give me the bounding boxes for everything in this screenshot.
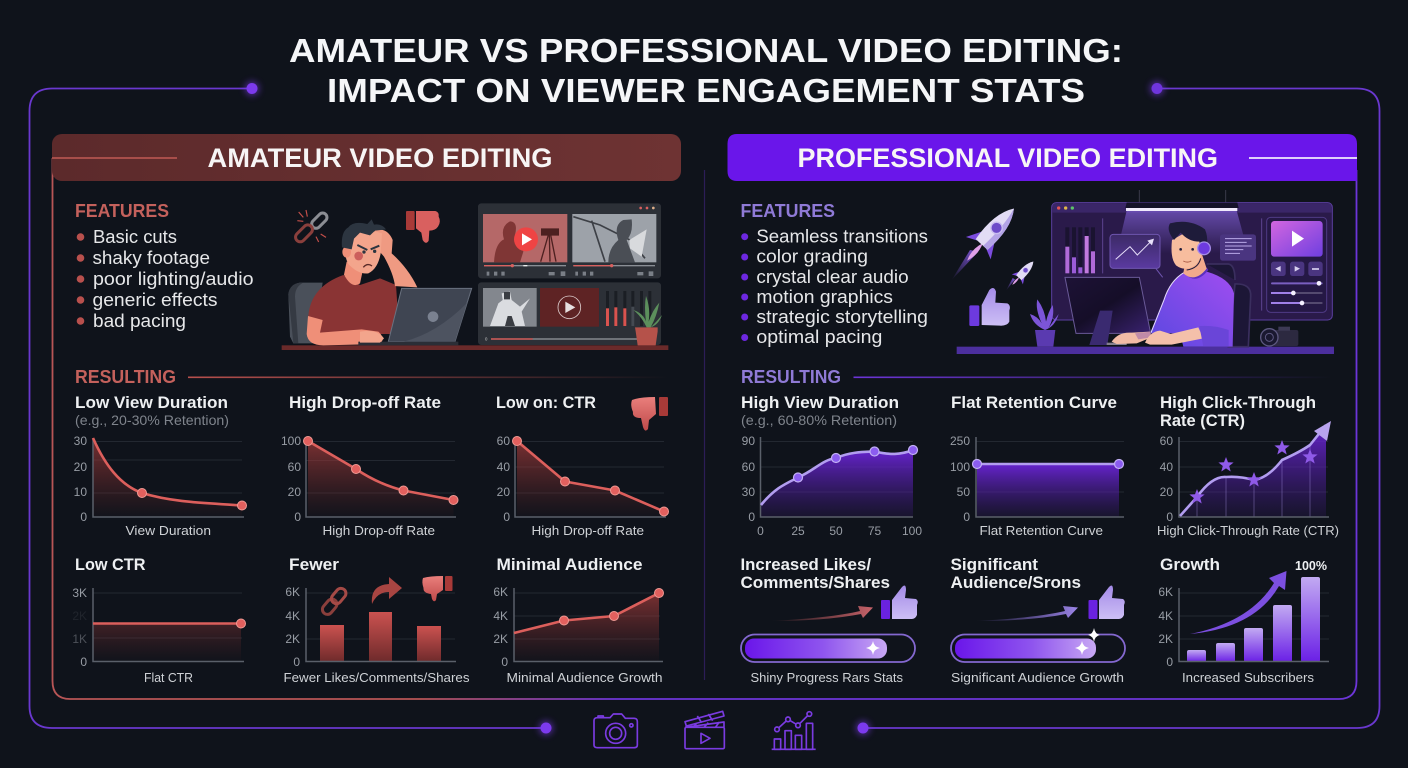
plant <box>1030 299 1059 347</box>
amateur header <box>52 134 681 181</box>
professional features list: optimal pacing <box>756 327 882 347</box>
chart: high view duration: (e.g., 60-80% Retention) <box>741 412 897 428</box>
title <box>289 32 1123 109</box>
chart: fewer likes bars: 2K <box>285 632 300 646</box>
desk <box>957 347 1334 354</box>
stat: increased likes progress bar <box>740 556 918 685</box>
foreground monitor <box>1065 277 1151 345</box>
chart: fewer likes bars: 4K <box>285 609 300 623</box>
title: IMPACT ON VIEWER ENGAGEMENT STATS <box>327 72 1085 109</box>
chart: flat retention curve: 250 <box>950 434 970 448</box>
amateur features list <box>75 201 254 331</box>
chart: high drop-off rate: 0 <box>294 510 301 524</box>
video player panel <box>1267 217 1327 312</box>
icon: thumbs up <box>881 586 918 619</box>
icon: small rocket <box>1006 257 1039 291</box>
professional features list: color grading <box>756 247 868 267</box>
chart: high click-through rate: High Click-Through <box>1160 394 1316 412</box>
chart: high view duration: High View Duration <box>741 394 899 412</box>
arrowhead <box>1314 421 1331 441</box>
camera <box>1261 327 1298 346</box>
chart: low on: ctr: 20 <box>497 485 510 499</box>
chart: subscriber growth bars: Increased Subscribers <box>1182 670 1315 685</box>
audio meters <box>1065 227 1095 273</box>
chart: low on: ctr: High Drop-off Rate <box>532 523 644 538</box>
chart: high drop-off rate: High Drop-off Rate <box>289 394 441 412</box>
icon: thumbs up <box>969 288 1010 326</box>
stat: increased likes progress bar: Shiny Progress Rars Stats <box>750 670 903 685</box>
chart: high click-through rate <box>1157 394 1339 538</box>
icon: broken chain <box>294 210 329 244</box>
amateur features list: FEATURES <box>75 201 169 221</box>
chart: high view duration: 90 <box>742 434 755 448</box>
video editor window bottom: 0 <box>485 337 488 342</box>
chart: low view duration: 0 <box>80 510 87 524</box>
chart: low view duration: 10 <box>74 485 87 499</box>
video editor window bottom <box>478 282 661 345</box>
amateur features list: generic effects <box>92 290 218 310</box>
panel: amateur video editing <box>52 134 681 685</box>
stat: significant audience growth progress bar: Significant Audience Growth <box>951 670 1124 685</box>
professional header <box>728 134 1357 181</box>
chart: low ctr flat: 0 <box>80 655 87 669</box>
chart: low ctr flat: Low CTR <box>75 556 146 574</box>
frustrated person <box>288 219 417 345</box>
chart: high view duration: 25 <box>791 524 805 538</box>
chart: low ctr flat: 1K <box>72 632 87 646</box>
amateur features list: shaky footage <box>92 248 210 268</box>
panel: professional video editing <box>728 134 1357 685</box>
stat: significant audience growth progress bar: Audience/Srons <box>950 574 1081 592</box>
chart: minimal audience growth: 4K <box>493 609 508 623</box>
amateur features list: bad pacing <box>93 311 186 331</box>
amateur features list: Basic cuts <box>93 227 177 247</box>
chart: subscriber growth bars: 4K <box>1158 609 1173 623</box>
growth arrow <box>1190 571 1286 634</box>
chart: fewer likes bars: Fewer <box>289 556 340 574</box>
icon: thumbs up <box>1088 586 1125 619</box>
professional features list: motion graphics <box>756 287 893 307</box>
chart: high view duration: 0 <box>748 510 755 524</box>
chart: minimal audience growth: 6K <box>493 585 508 599</box>
chart: high view duration: 0 <box>757 524 764 538</box>
stars <box>1189 440 1318 504</box>
resulting heading: RESULTING <box>741 367 841 387</box>
chart: fewer likes bars: Fewer Likes/Comments/Shares <box>284 670 470 685</box>
chart: low ctr flat: 3K <box>72 586 87 600</box>
chart: subscriber growth bars: 2K <box>1158 632 1173 646</box>
lamp <box>1125 203 1239 211</box>
chart: low ctr flat: 2K <box>72 609 87 623</box>
chart: low on: ctr: Low on: CTR <box>496 394 596 412</box>
chart: high view duration: 100 <box>902 524 922 538</box>
stat: significant audience growth progress bar: Significant <box>950 556 1039 574</box>
chart: low on: ctr: 60 <box>497 434 510 448</box>
chart: fewer likes bars: 0 <box>293 655 300 669</box>
chart: low view duration <box>74 394 246 538</box>
cords <box>1139 190 1226 203</box>
chart: fewer likes bars <box>284 556 470 685</box>
stat: increased likes progress bar: Increased Likes/ <box>740 556 871 574</box>
chart: low view duration: 20 <box>74 460 87 474</box>
icon: curved arrow <box>372 577 402 604</box>
progress bar <box>741 634 915 662</box>
icon: clapperboard <box>685 711 724 749</box>
chart: high view duration: 75 <box>868 524 881 538</box>
chart: high drop-off rate: High Drop-off Rate <box>322 523 435 538</box>
chart: high drop-off rate: 60 <box>288 460 301 474</box>
chart: high view duration: 30 <box>742 485 755 499</box>
chart: low view duration: Low View Duration <box>75 394 228 412</box>
chart: low ctr flat <box>72 556 246 685</box>
illustration: frustrated amateur editor <box>282 203 668 350</box>
chair <box>1207 264 1251 347</box>
chart: fewer likes bars: 6K <box>285 585 300 599</box>
desk <box>282 345 668 350</box>
laptop <box>358 288 472 345</box>
stat: significant audience growth progress bar <box>950 556 1125 685</box>
hands and sleeve on keyboard <box>1112 326 1229 347</box>
resulting heading: RESULTING <box>75 367 176 387</box>
chart: high click-through rate: 0 <box>1166 510 1173 524</box>
chart: minimal audience growth <box>493 556 664 685</box>
professional features list: strategic storytelling <box>756 307 928 327</box>
chart: high drop-off rate: 20 <box>288 485 301 499</box>
plant <box>633 296 662 345</box>
illustration: professional editor <box>952 190 1334 354</box>
icon: camera <box>594 714 637 748</box>
chart: low on: ctr: 0 <box>503 510 510 524</box>
chart: low on: ctr: 40 <box>497 460 510 474</box>
chart card <box>1110 234 1163 277</box>
chart: flat retention curve: Flat Retention Curve <box>951 394 1117 412</box>
chart: flat retention curve: 0 <box>963 510 970 524</box>
chart: minimal audience growth: Minimal Audience Growth <box>506 670 662 685</box>
professional features list <box>740 201 928 347</box>
chart: subscriber growth bars: 100% <box>1295 558 1327 573</box>
chart: subscriber growth bars: 0 <box>1166 655 1173 669</box>
video editor window top <box>478 203 661 278</box>
icon: thumbs down <box>406 211 440 243</box>
chart: high view duration: 60 <box>742 460 755 474</box>
person with headset <box>1150 222 1234 347</box>
professional header: PROFESSIONAL VIDEO EDITING <box>798 143 1218 173</box>
inner panel border <box>52 158 1356 699</box>
chart: high click-through rate: 40 <box>1160 460 1173 474</box>
chart: low ctr flat: Flat CTR <box>144 670 193 685</box>
chart: high click-through rate: 60 <box>1160 434 1173 448</box>
text card <box>1220 234 1256 261</box>
chart: minimal audience growth: Minimal Audience <box>496 556 642 574</box>
progress bar <box>951 628 1125 662</box>
chart: high drop-off rate <box>281 394 458 538</box>
chart: subscriber growth bars: 6K <box>1158 585 1173 599</box>
chart: high drop-off rate: 100 <box>281 434 301 448</box>
stat: increased likes progress bar: Comments/Shares <box>740 574 890 592</box>
chart: flat retention curve <box>950 394 1124 538</box>
icon: analytics chart <box>772 712 816 749</box>
chart: high view duration: 50 <box>829 524 843 538</box>
icon: thumbs down <box>631 397 668 431</box>
professional features list: crystal clear audio <box>756 267 909 287</box>
arrow <box>770 606 873 621</box>
chart: flat retention curve: 50 <box>957 485 970 499</box>
chart: high click-through rate: Rate (CTR) <box>1160 412 1245 430</box>
chart: subscriber growth bars: Growth <box>1160 556 1220 574</box>
icon: thumbs down <box>422 576 452 601</box>
chart: high view duration <box>741 394 922 538</box>
amateur header: AMATEUR VIDEO EDITING <box>208 143 552 173</box>
amateur features list: poor lighting/audio <box>93 269 254 289</box>
icon: large rocket <box>952 197 1026 280</box>
professional features list: Seamless transitions <box>756 226 928 246</box>
chart: flat retention curve: Flat Retention Curve <box>980 523 1103 538</box>
chart: flat retention curve: 100 <box>950 460 970 474</box>
professional features list: FEATURES <box>740 201 835 221</box>
chart: low view duration: (e.g., 20-30% Retention) <box>75 412 229 428</box>
chart: low view duration: View Duration <box>126 523 211 538</box>
chart: minimal audience growth: 0 <box>501 655 508 669</box>
chart: high click-through rate: 20 <box>1160 485 1173 499</box>
chart: low on: ctr <box>496 394 668 538</box>
icon: chain <box>320 586 348 616</box>
chart: low view duration: 30 <box>74 434 87 448</box>
chart: minimal audience growth: 2K <box>493 632 508 646</box>
wall display <box>1052 203 1332 320</box>
chart: high click-through rate: High Click-Through Rate (CTR) <box>1157 523 1339 538</box>
chart: subscriber growth bars <box>1158 556 1329 685</box>
arrow <box>975 606 1078 621</box>
title: AMATEUR VS PROFESSIONAL VIDEO EDITING: <box>289 32 1123 69</box>
